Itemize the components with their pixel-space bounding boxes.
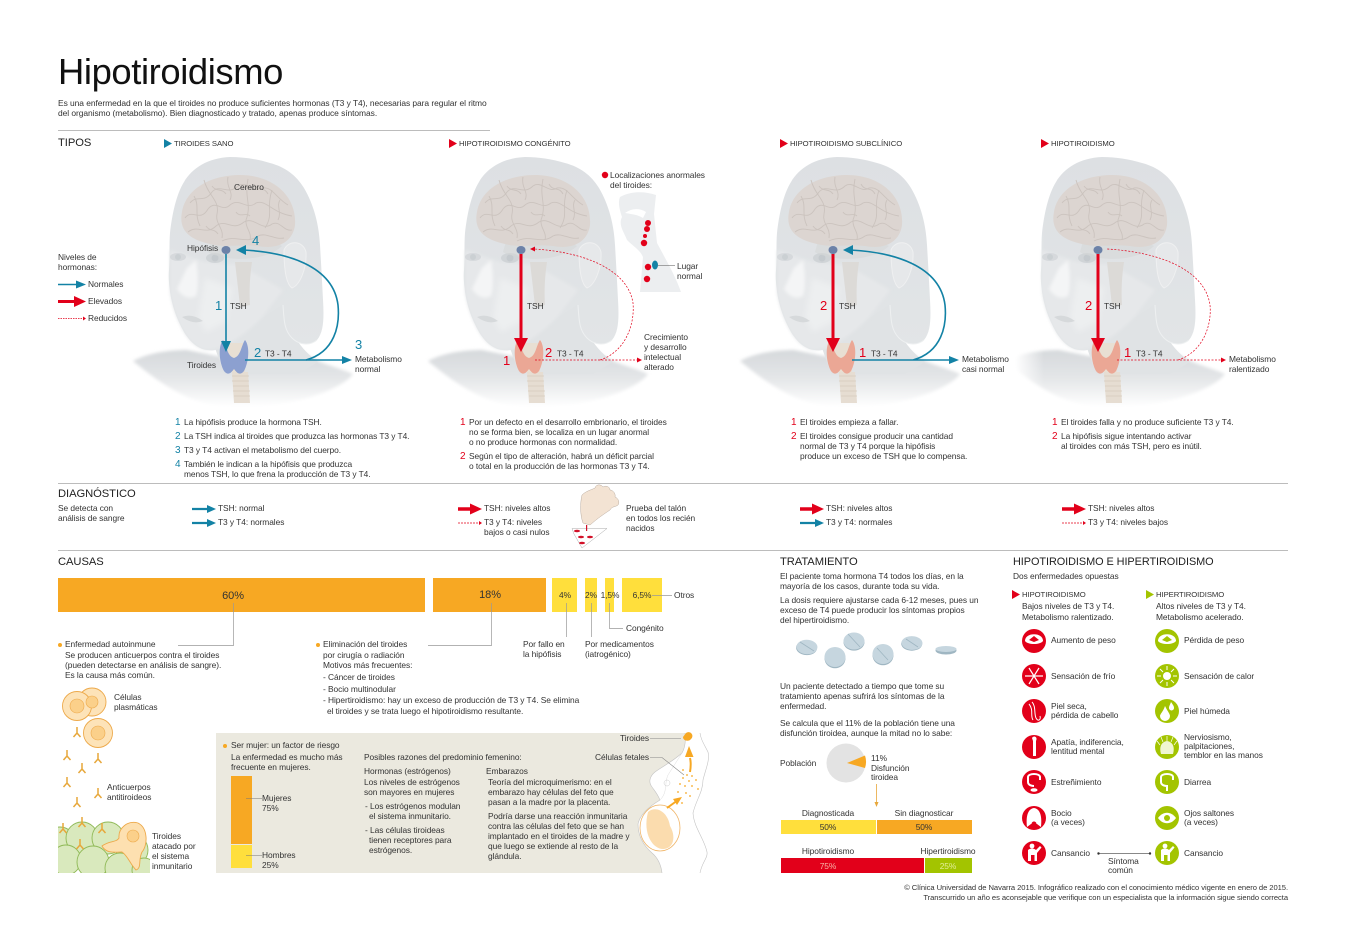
icon: piel seca: Piel seca, (1051, 701, 1087, 711)
intro text: del organismo (metabolismo). Bien diagnosticado y tratado, apenas produce síntomas. (58, 108, 377, 118)
panel: hipotiroidismo e hipertiroidismo (1012, 556, 1263, 875)
pie chart: población: Población (780, 758, 817, 768)
illustration labels: antitiroideos (107, 792, 151, 802)
text: prueba del talón: en todos los recién (626, 513, 696, 523)
heading: TRATAMIENTO (780, 556, 858, 568)
illustration labels: Células (114, 692, 142, 702)
text: El paciente toma hormona T4 todos los días, en la (780, 571, 964, 581)
panel: tratamiento (780, 556, 979, 873)
diagnosis: hipotiroidismo (1062, 503, 1168, 527)
labels: 2 (254, 345, 261, 360)
text: razones: Los niveles de estrógenos (364, 777, 460, 787)
labels (820, 298, 1009, 374)
pie chart: población: 11% (871, 753, 888, 763)
description: produce un exceso de TSH que lo compensa. (800, 451, 967, 461)
inset: localizaciones anormales: del tiroides: (610, 180, 652, 190)
bar: hipotiroidismo e hipertiroidismo: 25% (940, 861, 957, 871)
labels: tiroides, células fetales: Células fetales (595, 752, 649, 762)
inset: localizaciones anormales: Lugar (677, 261, 698, 271)
bar chart: causes (58, 578, 694, 659)
text: mayoría de los casos, durante toda su vida. (780, 581, 939, 591)
icon: ojos saltones: (a veces) (1184, 817, 1218, 827)
legend: niveles de hormonas: Normales (88, 279, 123, 289)
illustration: pregnant woman (638, 732, 709, 873)
type heading: HIPOTIROIDISMO (1051, 139, 1115, 148)
icon: estreñimiento: Estreñimiento (1051, 777, 1102, 787)
hormone arrows (1091, 249, 1226, 362)
bar: diagnosticada: Diagnosticada (802, 808, 855, 818)
description: Según el tipo de alteración, habrá un déficit parcial (469, 451, 654, 461)
labels: T3 - T4 (871, 348, 898, 358)
labels: Metabolismo (355, 354, 402, 364)
labels: 1 (215, 298, 222, 313)
labels: ralentizado (1229, 364, 1270, 374)
text (780, 681, 955, 738)
text: eliminación del tiroides: - Hipertiroidismo: hay un exceso de producción de T3 y T4. Se elimina (323, 695, 580, 705)
labels: Metabolismo (1229, 354, 1276, 364)
labels: Tiroides (187, 360, 216, 370)
text: prueba del talón (626, 503, 696, 533)
bar chart: causes: 1,5% (601, 590, 620, 600)
icon: diarrea: Diarrea (1184, 777, 1211, 787)
illustration labels: plasmáticas (114, 702, 158, 712)
labels: 2 (545, 345, 552, 360)
panel: diagnóstico (58, 485, 1168, 548)
icon: pérdida de peso: Pérdida de peso (1184, 635, 1244, 645)
labels: 1 (503, 353, 510, 368)
labels: normal (355, 364, 380, 374)
labels: T3 - T4 (265, 348, 292, 358)
description: normal de T3 y T4 porque la hipófisis (800, 441, 935, 451)
text: embarazos: que luego se extiende al resto de la (488, 841, 618, 851)
text: razones: Hormonas (estrógenos) (364, 766, 451, 776)
icon: sensación de calor: Sensación de calor (1184, 671, 1254, 681)
diagnosis: hipotiroidismo: T3 y T4: niveles bajos (1088, 517, 1168, 527)
panel: causas (45, 556, 694, 883)
text: Un paciente detectado a tiempo que tome su (780, 681, 945, 691)
illustration labels: Tiroides (152, 831, 181, 841)
labels (187, 182, 402, 374)
legend: niveles de hormonas: Elevados (88, 296, 122, 306)
illustration labels (107, 692, 196, 871)
icon: apatía (1022, 735, 1124, 759)
head illustration: hipotiroidismo (1005, 157, 1225, 407)
subheading: Dos enfermedades opuestas (1013, 571, 1119, 581)
description: 3 (175, 445, 181, 456)
text: eliminación del tiroides: Eliminación del tiroides (323, 639, 407, 649)
labels: tiroides, células fetales (595, 733, 684, 775)
head illustration (740, 157, 960, 407)
head illustration (428, 157, 648, 407)
column heading: hipertiroidismo: Metabolismo acelerado. (1156, 612, 1244, 622)
illustration labels: Anticuerpos (107, 782, 151, 792)
description: análisis de sangre (58, 513, 125, 523)
text: disfunción tiroidea, aunque la mitad no lo sabe: (780, 728, 952, 738)
description: El tiroides consigue producir una cantidad (800, 431, 953, 441)
text: factor de riesgo: Ser mujer: un factor de riesgo (231, 740, 340, 750)
labels (1085, 298, 1276, 374)
illustration labels: atacado por (152, 841, 196, 851)
type heading: HIPOTIROIDISMO CONGÉNITO (459, 139, 571, 148)
text: embarazos: glándula. (488, 851, 521, 861)
text: embarazos: pasan a la madre por la placenta. (488, 797, 610, 807)
description: La hipófisis produce la hormona TSH. (184, 417, 322, 427)
bar chart: causes: 4% (559, 590, 572, 600)
bar chart: causes: Congénito (626, 623, 664, 633)
bar: mujeres y hombres: 75% (262, 803, 279, 813)
bar: diagnosticada: 50% (916, 822, 933, 832)
heading: DIAGNÓSTICO (58, 487, 136, 500)
panel: hipotiroidismo congénito (428, 139, 705, 471)
bar: hipotiroidismo e hipertiroidismo: Hipotiroidismo (802, 846, 855, 856)
illustration: autoimmune attack (58, 688, 150, 873)
labels: TSH (527, 301, 544, 311)
description: 1 (1052, 417, 1058, 428)
labels: Cerebro (234, 182, 264, 192)
icon: bocio: (a veces) (1051, 817, 1085, 827)
labels: tiroides, células fetales: Tiroides (620, 733, 649, 743)
type heading: TIROIDES SANO (174, 139, 234, 148)
bar: hipotiroidismo e hipertiroidismo: 75% (820, 861, 837, 871)
bar: diagnosticada: 50% (820, 822, 837, 832)
labels: TSH (230, 301, 247, 311)
icon: sensación de frío (1022, 664, 1116, 688)
bar chart: causes: (iatrogénico) (585, 649, 631, 659)
panel: tiroides sano (133, 139, 409, 479)
icon: cansancio (1022, 841, 1090, 865)
labels: y desarrollo (644, 342, 687, 352)
text: razones (364, 752, 522, 855)
description: Se detecta con (58, 503, 113, 513)
labels: 2 (820, 298, 827, 313)
icon: apatía: Apatía, indiferencia, (1051, 737, 1124, 747)
text: exceso de T4 puede producir los síntomas propios (780, 605, 965, 615)
diagnosis: hipotiroidismo: TSH: niveles altos (1088, 503, 1154, 513)
icon: piel seca: pérdida de cabello (1051, 710, 1119, 720)
text: embarazos: Podría darse una reacción inmunitaria (488, 811, 628, 821)
icon: nerviosismo: temblor en las manos (1184, 750, 1263, 760)
icon: bocio (1022, 806, 1085, 830)
panel: ser mujer (216, 732, 709, 873)
text: embarazos: contra las células del feto que se han (488, 821, 624, 831)
description: También le indican a la hipófisis que produzca (184, 459, 353, 469)
footer credit: Transcurrido un año es aconsejable que verifique con un especialista que la información sigue siendo correcta (923, 893, 1289, 902)
background box (216, 733, 685, 873)
text: eliminación del tiroides: - Cáncer de tiroides (323, 672, 395, 682)
title: Hipotiroidismo (58, 51, 283, 92)
pie chart: población: tiroidea (871, 772, 898, 782)
description: no se forma bien, se localiza en un lugar anormal (469, 427, 649, 437)
text: razones: - Los estrógenos modulan (365, 801, 461, 811)
illustration labels: inmunitario (152, 861, 193, 871)
text: enfermedad autoinmune: Es la causa más común. (65, 670, 155, 680)
icon: cansancio: Cansancio (1184, 848, 1223, 858)
description: 2 (791, 431, 797, 442)
legend: niveles de hormonas: Niveles de (58, 252, 97, 262)
bar chart: causes: Por medicamentos (585, 639, 654, 649)
labels: Metabolismo (962, 354, 1009, 364)
text: prueba del talón: Prueba del talón (626, 503, 686, 513)
hormone arrows (514, 246, 642, 362)
labels: T3 - T4 (1136, 348, 1163, 358)
diagnosis: congénito: bajos o casi nulos (484, 527, 550, 537)
bar: mujeres y hombres (231, 776, 296, 870)
heading: HIPOTIROIDISMO E HIPERTIROIDISMO (1013, 556, 1214, 568)
text: embarazos: implantado en el tiroides de la madre y (488, 831, 630, 841)
bar: mujeres y hombres: Hombres (262, 850, 296, 860)
bar chart: causes: 6,5% (633, 590, 652, 600)
labels: 1 (859, 345, 866, 360)
icon: nerviosismo: Nerviosismo, (1184, 732, 1232, 742)
text: eliminación del tiroides: - Bocio multinodular (323, 684, 396, 694)
diagnosis: sano: T3 y T4: normales (218, 517, 284, 527)
type heading: HIPOTIROIDISMO SUBCLÍNICO (790, 139, 902, 148)
description: 1 (791, 417, 797, 428)
text: prueba del talón: nacidos (626, 523, 654, 533)
text: La dosis requiere ajustarse cada 6-12 meses, pues un (780, 595, 979, 605)
bar chart: causes: 2% (585, 590, 598, 600)
text: embarazos (486, 766, 630, 861)
illustration labels: el sistema (152, 851, 190, 861)
description: 4 (175, 459, 181, 470)
diagnosis: congénito (458, 503, 550, 537)
icon: piel húmeda (1155, 699, 1230, 723)
labels: casi normal (962, 364, 1004, 374)
text: razones: Posibles razones del predominio femenino: (364, 752, 522, 762)
heading: CAUSAS (58, 556, 104, 568)
text: enfermedad autoinmune: (pueden detectarse en análisis de sangre). (65, 660, 221, 670)
labels: TSH (1104, 301, 1121, 311)
inset: localizaciones anormales (602, 170, 705, 292)
icon: sensación de calor (1155, 664, 1254, 688)
icon: ojos saltones (1155, 806, 1234, 830)
diagnosis: congénito: TSH: niveles altos (484, 503, 550, 513)
icon: cansancio (1155, 841, 1223, 865)
text: embarazos: Embarazos (486, 766, 528, 776)
bar: mujeres y hombres: 25% (262, 860, 279, 870)
icon: bocio: Bocio (1051, 808, 1072, 818)
síntoma común arrow: común (1108, 865, 1133, 875)
text: enfermedad autoinmune: Se producen anticuerpos contra el tiroides (65, 650, 219, 660)
bar chart: causes: 60% (222, 590, 244, 602)
footer credit: © Clínica Universidad de Navarra 2015. Infográfico realizado con el conocimiento médico vigente en enero de 2015. (904, 883, 1288, 892)
description: o no produce hormonas con normalidad. (469, 437, 617, 447)
legend: niveles de hormonas: hormonas: (58, 262, 97, 272)
bar: diagnosticada (781, 808, 972, 834)
description (58, 503, 125, 523)
labels: Hipófisis (187, 243, 218, 253)
description (1052, 417, 1234, 451)
icon: foot heel test (572, 485, 619, 548)
icon: cansancio: Cansancio (1051, 848, 1090, 858)
text: enfermedad autoinmune: Enfermedad autoinmune (65, 639, 156, 649)
diagnosis: subclínico: TSH: niveles altos (826, 503, 892, 513)
legend: niveles de hormonas (58, 252, 127, 323)
labels: 1 (1124, 345, 1131, 360)
labels (503, 301, 688, 372)
labels: 3 (355, 337, 362, 352)
icon: nerviosismo (1155, 732, 1263, 760)
description: 1 (460, 417, 466, 428)
bar: hipotiroidismo e hipertiroidismo (781, 846, 976, 873)
heading: tipos: TIPOS (58, 137, 91, 149)
description: La hipófisis sigue intentando activar (1061, 431, 1192, 441)
icon: sensación de frío: Sensación de frío (1051, 671, 1116, 681)
icon: apatía: lentitud mental (1051, 746, 1105, 756)
column heading: hipotiroidismo: Metabolismo ralentizado. (1022, 612, 1114, 622)
text: enfermedad. (780, 701, 826, 711)
text: factor de riesgo: frecuente en mujeres. (231, 762, 311, 772)
description: 2 (1052, 431, 1058, 442)
description (460, 417, 667, 471)
description: o total en la producción de las hormonas T3 y T4. (469, 461, 650, 471)
icon: aumento de peso: Aumento de peso (1051, 635, 1116, 645)
pie chart: población (780, 744, 910, 807)
text: tratamiento apenas sufrirá los síntomas de la (780, 691, 945, 701)
inset: localizaciones anormales: Localizaciones anormales (610, 170, 705, 180)
description: menos TSH, lo que frena la producción de T3 y T4. (184, 469, 371, 479)
text: del hipertiroidismo. (780, 615, 849, 625)
text (780, 571, 979, 625)
legend: niveles de hormonas: Reducidos (88, 313, 127, 323)
labels: 2 (1085, 298, 1092, 313)
text: embarazos: embarazo hay células del feto que (488, 787, 614, 797)
labels: 4 (252, 233, 259, 248)
labels: T3 - T4 (557, 348, 584, 358)
column heading: hipertiroidismo: Altos niveles de T3 y T4. (1156, 601, 1246, 611)
text: razones: estrógenos. (369, 845, 412, 855)
text: enfermedad autoinmune (58, 639, 221, 680)
panel: hipotiroidismo (1041, 139, 1276, 451)
column heading: hipotiroidismo (1012, 590, 1114, 622)
labels: Crecimiento (644, 332, 688, 342)
description: 2 (175, 431, 181, 442)
labels: alterado (644, 362, 674, 372)
column heading: hipotiroidismo: Bajos niveles de T3 y T4. (1022, 601, 1114, 611)
bar chart: causes: Por fallo en (523, 639, 565, 649)
text: razones: - Las células tiroideas (365, 825, 445, 835)
hormone arrows (221, 245, 352, 364)
bar chart: causes: 18% (479, 589, 501, 601)
bar: diagnosticada: Sin diagnosticar (895, 808, 954, 818)
column heading: hipertiroidismo (1146, 590, 1246, 622)
diagnosis: sano (192, 503, 284, 527)
description: Por un defecto en el desarrollo embrionario, el tiroides (469, 417, 667, 427)
pie chart: población: Disfunción (871, 763, 910, 773)
text: eliminación del tiroides (316, 639, 580, 716)
column heading: hipotiroidismo: HIPOTIROIDISMO (1022, 590, 1086, 599)
hormone arrows (826, 245, 959, 364)
text: factor de riesgo (223, 740, 343, 772)
text: Se calcula que el 11% de la población tiene una (780, 718, 955, 728)
labels: intelectual (644, 352, 681, 362)
text: factor de riesgo: La enfermedad es mucho más (231, 752, 343, 762)
diagnosis: subclínico: T3 y T4: normales (826, 517, 892, 527)
icon: estreñimiento (1022, 770, 1102, 794)
bar chart: causes: Otros (674, 590, 694, 600)
text: eliminación del tiroides: por cirugía o radiación (323, 650, 405, 660)
icon: pills (793, 632, 956, 668)
description: El tiroides empieza a fallar. (800, 417, 898, 427)
icon: diarrea (1155, 770, 1211, 794)
column heading: hipertiroidismo: HIPERTIROIDISMO (1156, 590, 1224, 599)
text: embarazos: Teoría del microquimerismo: en el (488, 777, 612, 787)
síntoma común arrow (1097, 852, 1151, 875)
bar chart: causes: la hipófisis (523, 649, 561, 659)
text: razones: tienen receptores para (369, 835, 452, 845)
icon: pérdida de peso (1155, 629, 1244, 653)
inset: localizaciones anormales: normal (677, 271, 702, 281)
bar: hipotiroidismo e hipertiroidismo: Hipertiroidismo (921, 846, 976, 856)
head illustration (133, 157, 353, 407)
icon: piel seca (1022, 699, 1119, 723)
description: 2 (460, 451, 466, 462)
text: razones: el sistema inmunitario. (369, 811, 451, 821)
text: eliminación del tiroides: Motivos más frecuentes: (323, 660, 412, 670)
description: T3 y T4 activan el metabolismo del cuerpo. (184, 445, 341, 455)
description: 1 (175, 417, 181, 428)
description: El tiroides falla y no produce suficiente T3 y T4. (1061, 417, 1234, 427)
icon: aumento de peso (1022, 629, 1116, 653)
icon: piel húmeda: Piel húmeda (1184, 706, 1230, 716)
text: razones: son mayores en mujeres (364, 787, 454, 797)
footer credit (904, 883, 1289, 902)
text: eliminación del tiroides: el tiroides y se trata luego el hipotiroidismo resultante. (327, 706, 523, 716)
labels: TSH (839, 301, 856, 311)
description: al tiroides con más TSH, pero es inútil. (1061, 441, 1202, 451)
bar: mujeres y hombres: Mujeres (262, 793, 291, 803)
diagnosis: sano: TSH: normal (218, 503, 265, 513)
intro text: Es una enfermedad en la que el tiroides no produce suficientes hormonas (T3 y T4), necesarias para regular el ritmo (58, 98, 487, 108)
icon: ojos saltones: Ojos saltones (1184, 808, 1234, 818)
diagnosis: subclínico (800, 503, 892, 527)
description (175, 417, 409, 479)
description (791, 417, 967, 461)
panel: hipotiroidismo subclínico (740, 139, 1009, 461)
síntoma común arrow: Síntoma (1108, 856, 1139, 866)
icon: nerviosismo: palpitaciones, (1184, 741, 1234, 751)
description: La TSH indica al tiroides que produzca las hormonas T3 y T4. (184, 431, 409, 441)
diagnosis: congénito: T3 y T4: niveles (484, 517, 542, 527)
